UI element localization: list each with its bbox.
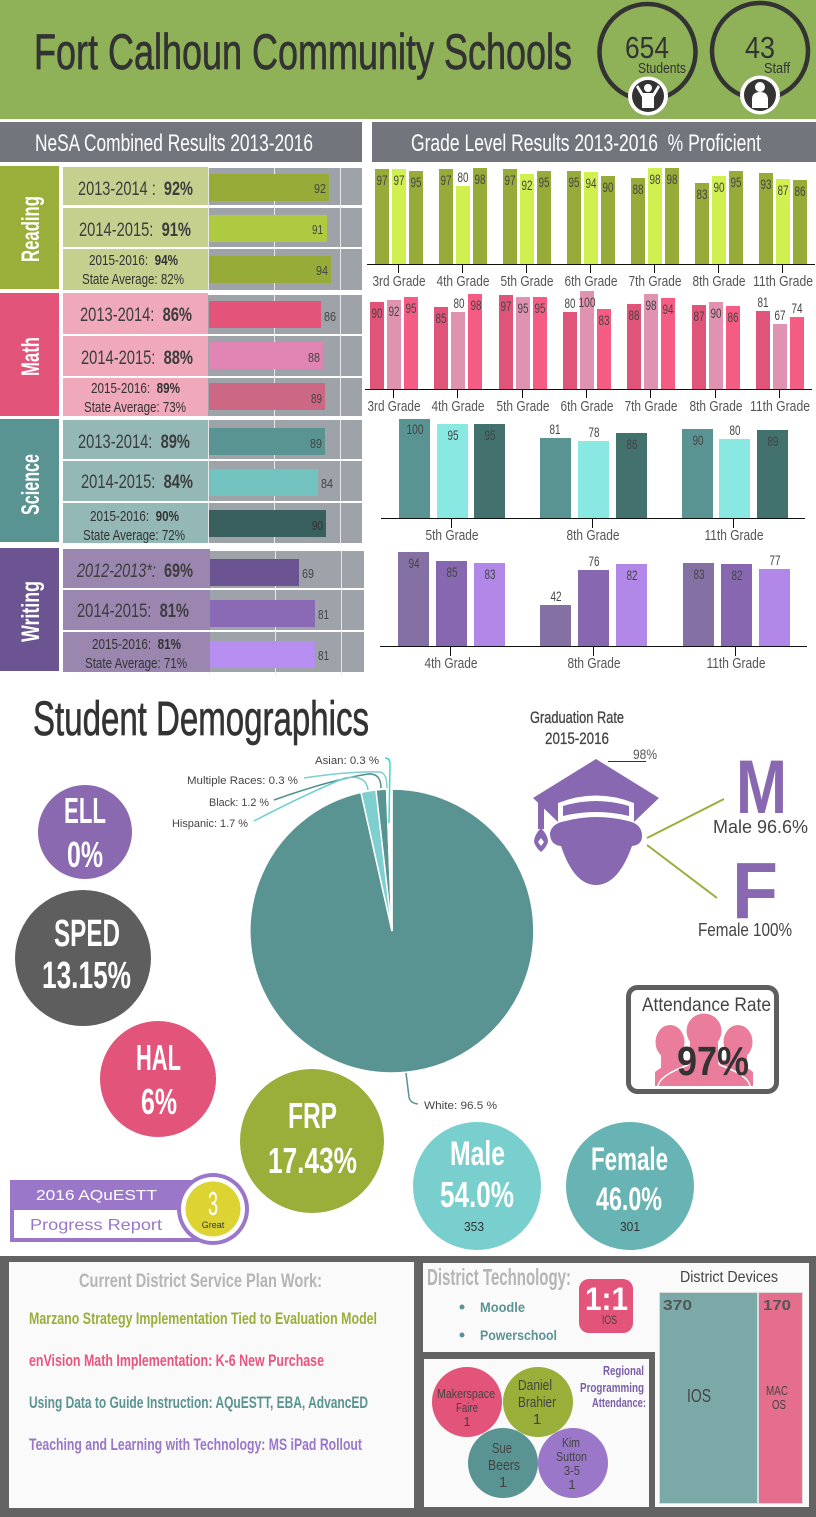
stat: staff: Staff [764, 60, 791, 77]
bubble: male: Male [450, 1135, 505, 1173]
bars: 4th grade: 94 [408, 556, 420, 571]
bubble: SPED: 13.15% [42, 955, 131, 997]
bars: 3rd grade [372, 169, 426, 290]
bars: 6th grade: 100 [578, 295, 596, 310]
bars: 8th grade: 86 [728, 310, 738, 325]
bubble: female [566, 1122, 694, 1250]
row: writing 2014-2015: 81 [318, 607, 329, 622]
tile: IOS: 370 [663, 1297, 692, 1314]
row: reading 2015-2016: State Average: 82% [82, 271, 184, 288]
bars: 8th grade: 8th Grade [692, 274, 746, 290]
bars: 8th grade: 90 [714, 180, 724, 195]
bars: 8th grade: 95 [730, 175, 742, 190]
callout: overall rate [608, 746, 657, 762]
heading: regional programming: Regional [603, 1363, 644, 1378]
bars: 11th grade: 77 [770, 553, 780, 568]
bubble: SPED [15, 890, 151, 1026]
bubble: Daniel Brahier [503, 1367, 573, 1437]
heading: NeSA combined results: NeSA Combined Results 2013-2016 [35, 130, 313, 157]
chart: math by grade [365, 291, 812, 415]
bars: 4th grade [432, 294, 484, 415]
row: math 2013-2014: 2013-2014: 86% [80, 305, 192, 326]
bubble: Kim Sutton: 1 [568, 1477, 576, 1492]
bars: 6th grade: 6th Grade [564, 274, 618, 290]
bars: 5th grade: 5th Grade [426, 528, 478, 544]
bubble: Daniel Brahier: Daniel [518, 1377, 552, 1394]
stat: students: 654 [625, 30, 669, 65]
bubble: ELL: ELL [64, 790, 106, 831]
bars: 8th grade: 8th Grade [690, 399, 742, 415]
pie chart: student race [172, 755, 534, 1112]
bubble: Daniel Brahier: Brahier [518, 1394, 556, 1411]
label: white [406, 1073, 497, 1112]
subject label: math [0, 293, 59, 416]
bubble: ELL [38, 785, 132, 879]
heading: regional programming [580, 1363, 646, 1410]
label: black: Black: 1.2 % [209, 797, 269, 809]
row: reading 2014-2015: 91 [312, 222, 323, 237]
bubble: female: Female [591, 1141, 668, 1177]
bubble: male: 54.0% [440, 1174, 514, 1215]
row: math 2014-2015 [63, 336, 323, 376]
male rate [713, 745, 808, 837]
female rate [698, 846, 792, 940]
row: science 2014-2015: 2014-2015: 84% [81, 472, 193, 493]
row: reading 2015-2016: 2015-2016: 94% [89, 252, 178, 269]
bars: 11th grade: 67 [774, 308, 786, 323]
bars: 4th grade: 83 [484, 567, 496, 582]
row: writing 2012-2013: 2012-2013*: 69% [76, 561, 193, 582]
row: reading 2013-2014 [63, 167, 329, 205]
heading: regional programming: Programming [580, 1380, 644, 1395]
badge: 1:1 IOS: 1:1 [585, 1281, 628, 1317]
bars: 7th grade: 98 [666, 172, 678, 187]
bars: 11th grade: 11th Grade [704, 528, 764, 544]
bars: 4th grade: 98 [470, 298, 482, 313]
tile: MAC OS [759, 1293, 802, 1503]
panel: math combined results [0, 293, 362, 416]
bars: 8th grade: 76 [588, 554, 600, 569]
row: math 2013-2014 [63, 293, 336, 334]
stat: staff [712, 3, 808, 114]
heading: student demographics: Student Demographics [33, 693, 369, 746]
bars: 8th grade [690, 302, 742, 415]
bubble: FRP [240, 1069, 384, 1213]
bars: 11th grade: 74 [792, 301, 803, 316]
bubble: Makerspace Faire: 1 [463, 1414, 471, 1429]
item: enVision: enVision Math Implementation: K-6 New Purchase [29, 1351, 324, 1370]
bars: 11th grade: 83 [694, 567, 704, 582]
tile: MAC OS: MAC [766, 1383, 788, 1398]
row: reading 2015-2016: 94 [316, 263, 328, 278]
bars: 8th grade: 87 [694, 309, 704, 324]
bubble: Kim Sutton [538, 1428, 608, 1498]
panel: writing combined results [0, 548, 364, 675]
chart: reading by grade [367, 168, 815, 290]
badge: 1:1 IOS [579, 1279, 633, 1333]
connector: male [647, 799, 724, 838]
icon: group of people [655, 1014, 753, 1088]
bars: 11th grade [683, 553, 790, 672]
bars: 11th grade: 87 [778, 183, 788, 198]
bars: 5th grade: 95 [518, 301, 528, 316]
stat: students [600, 4, 696, 116]
panel: science combined results [0, 419, 362, 544]
tile: MAC OS: 170 [763, 1297, 791, 1314]
bubble: Kim Sutton: Kim [562, 1435, 580, 1450]
badge: AQuESTT progress report [10, 1173, 249, 1245]
bars: 4th grade: 4th Grade [432, 399, 484, 415]
bars: 8th grade: 90 [710, 306, 722, 321]
bars: 5th grade: 92 [522, 178, 532, 193]
bars: 11th grade: 82 [732, 568, 742, 583]
row: reading 2015-2016 [63, 249, 331, 290]
row: science 2013-2014 [63, 420, 325, 459]
bars: 5th grade [496, 295, 550, 415]
icon: adult with child [740, 76, 780, 114]
bars: 8th grade [540, 554, 647, 672]
bars: 11th grade: 89 [768, 434, 778, 449]
panel: attendance rate [628, 988, 776, 1092]
badge: AQuESTT progress report: 2016 AQuESTT [36, 1187, 157, 1204]
bars: 8th grade: 81 [550, 422, 560, 437]
bubble: FRP: FRP [288, 1095, 337, 1136]
item: technology: Teaching and Learning with Technology: MS iPad Rollout [29, 1435, 362, 1454]
bubble: FRP: 17.43% [268, 1140, 357, 1181]
bars: 5th grade: 95 [534, 301, 546, 316]
bubble: ELL: 0% [67, 834, 103, 875]
bars: 6th grade [560, 291, 614, 415]
row: reading 2014-2015: 2014-2015: 91% [79, 220, 191, 241]
heading: graduation year: 2015-2016 [545, 729, 609, 748]
bars: 4th grade [398, 552, 505, 672]
bubble: Sue Beers [468, 1428, 538, 1498]
bars: 4th grade: 80 [454, 296, 464, 311]
bubble: male: 353 [464, 1219, 484, 1234]
panel: district technology [423, 1263, 809, 1507]
bars: 4th grade: 4th Grade [436, 274, 490, 290]
row: science 2015-2016: 2015-2016: 90% [90, 508, 179, 525]
bars: 3rd grade: 90 [372, 306, 382, 321]
subject label: reading [0, 166, 59, 289]
heading: regional programming: Attendance: [592, 1395, 646, 1410]
chart: writing by grade [380, 552, 807, 672]
bars: 7th grade [624, 294, 678, 415]
subject label: writing: Writing [17, 581, 45, 642]
bars: 6th grade: 90 [602, 180, 614, 195]
bars: 6th grade: 80 [564, 296, 576, 311]
bars: 7th grade: 98 [650, 172, 660, 187]
chart: district devices treemap [659, 1269, 803, 1504]
heading: graduation rate: Graduation Rate [530, 708, 624, 727]
bars: 8th grade: 82 [626, 568, 638, 583]
bars: 3rd grade: 3rd Grade [368, 399, 420, 415]
bars: 6th grade: 83 [598, 313, 610, 328]
row: science 2013-2014: 2013-2014: 89% [78, 432, 190, 453]
heading: district technology: District Technology: [427, 1264, 571, 1290]
badge: AQuESTT progress report: Progress Report [30, 1217, 163, 1234]
bars: 11th grade: 11th Grade [706, 656, 766, 672]
tile: IOS: IOS [687, 1386, 711, 1406]
bars: 4th grade: 80 [458, 170, 468, 185]
row: writing 2015-2016 [63, 632, 329, 672]
header banner [0, 0, 816, 119]
row: math 2015-2016: State Average: 73% [84, 399, 186, 416]
subject label: writing [0, 548, 59, 671]
male rate: Male 96.6% [713, 817, 808, 837]
row: reading 2013-2014: 92 [314, 181, 326, 196]
bars: 6th grade: 94 [586, 176, 597, 191]
bars: 6th grade: 6th Grade [560, 399, 614, 415]
list: technology tools: Moodle [480, 1299, 525, 1315]
bars: 7th grade: 88 [632, 182, 644, 197]
bars: 11th grade: 80 [730, 423, 740, 438]
bars: 4th grade: 4th Grade [424, 656, 478, 672]
row: science 2015-2016 [63, 503, 326, 544]
label: black [209, 774, 381, 809]
label: hispanic [172, 777, 368, 830]
item: Marzano: Marzano Strategy Implementation Tied to Evaluation Model [29, 1309, 377, 1328]
stat: staff: 43 [745, 30, 775, 65]
bars: 3rd grade [368, 297, 420, 415]
bars: 7th grade: 94 [662, 302, 674, 317]
subject label: science: Science [17, 454, 45, 515]
chart: science by grade [381, 419, 805, 544]
bars: 8th grade: 86 [626, 437, 638, 452]
stat: students: Students [638, 60, 686, 77]
bars: 5th grade [500, 169, 554, 290]
chart: district devices treemap: District Devices [680, 1269, 778, 1286]
bubble: Daniel Brahier: 1 [533, 1411, 541, 1428]
bars: 11th grade [750, 295, 810, 415]
bars: 5th grade: 95 [484, 428, 496, 443]
bubble: HAL: HAL [136, 1037, 181, 1078]
bubble: Makerspace Faire [432, 1367, 502, 1437]
bars: 5th grade: 97 [504, 173, 516, 188]
bars: 3rd grade: 3rd Grade [372, 274, 426, 290]
row: writing 2015-2016: State Average: 71% [85, 655, 187, 672]
subject label: science [0, 419, 59, 542]
badge: AQuESTT progress report: Great [202, 1220, 225, 1230]
subject label: reading: Reading [17, 196, 45, 262]
bars: 6th grade: 95 [568, 175, 580, 190]
female rate: Female 100% [698, 920, 792, 940]
graduation rate [530, 708, 808, 940]
bars: 11th grade [753, 173, 813, 290]
row: writing 2014-2015: 2014-2015: 81% [77, 601, 189, 622]
icon: child with raised arms [628, 76, 668, 116]
bars: 8th grade: 78 [588, 425, 600, 440]
label: multiple races [187, 772, 387, 788]
bubble: SPED: SPED [54, 913, 120, 955]
bars: 11th grade: 90 [692, 433, 704, 448]
row: math 2014-2015: 2014-2015: 88% [81, 348, 193, 369]
panel: attendance rate: Attendance Rate [642, 995, 771, 1016]
row: writing 2015-2016: 2015-2016: 81% [92, 636, 181, 653]
bubble: Sue Beers: Sue [492, 1440, 512, 1457]
label: white: White: 96.5 % [424, 1100, 497, 1112]
row: math 2014-2015: 88 [308, 350, 320, 365]
title: Fort Calhoun Community Schools [34, 24, 572, 80]
row: math 2015-2016: 2015-2016: 89% [91, 380, 180, 397]
item: using data: Using Data to Guide Instruction: AQuESTT, EBA, AdvancED [29, 1393, 368, 1412]
bars: 3rd grade: 97 [376, 173, 388, 188]
label: hispanic: Hispanic: 1.7 % [172, 818, 248, 830]
bubble: female: 301 [620, 1219, 640, 1234]
row: science 2015-2016: 90 [312, 518, 323, 533]
label: multiple races: Multiple Races: 0.3 % [187, 775, 298, 787]
bars: 3rd grade: 92 [388, 304, 400, 319]
bubble: Kim Sutton: 3-5 [564, 1463, 580, 1478]
bars: 5th grade: 95 [538, 175, 550, 190]
callout: overall rate: 98% [633, 746, 657, 762]
tile: MAC OS: OS [772, 1397, 786, 1412]
bars: 8th grade [540, 422, 647, 544]
row: science 2014-2015 [63, 461, 333, 501]
bubble: Sue Beers: 1 [499, 1474, 507, 1491]
bubble: Sue Beers: Beers [488, 1457, 520, 1474]
bars: 4th grade [436, 168, 490, 290]
row: math 2015-2016 [63, 378, 325, 416]
panel: attendance rate: 97% [677, 1038, 749, 1084]
bars: 8th grade: 83 [696, 187, 708, 202]
bars: 7th grade: 98 [646, 298, 656, 313]
bars: 7th grade: 88 [628, 308, 640, 323]
bars: 8th grade [692, 171, 746, 290]
bars: 5th grade: 5th Grade [500, 274, 554, 290]
bars: 11th grade: 81 [758, 295, 768, 310]
bars: 8th grade: 42 [550, 589, 562, 604]
badge: AQuESTT progress report: 3 [208, 1185, 218, 1222]
badge: 1:1 IOS: IOS [602, 1313, 617, 1327]
heading: NeSA combined results [0, 122, 362, 162]
bars: 3rd grade: 97 [394, 173, 404, 188]
label: asian: Asian: 0.3 % [315, 755, 379, 767]
list: technology tools [460, 1299, 557, 1343]
bubble: Kim Sutton: Sutton [556, 1449, 587, 1464]
footer background [0, 1256, 816, 1517]
row: math 2013-2014: 86 [324, 309, 336, 324]
panel: reading combined results [0, 166, 362, 290]
bars: 5th grade: 95 [448, 428, 458, 443]
subject label: math: Math [17, 337, 45, 376]
bars: 11th grade: 86 [794, 184, 806, 199]
bubble: HAL: 6% [141, 1081, 177, 1122]
bars: 4th grade: 85 [436, 311, 446, 326]
bars: 8th grade: 8th Grade [566, 528, 620, 544]
bars: 4th grade: 97 [440, 173, 452, 188]
bubble: Makerspace Faire: Faire [456, 1400, 478, 1415]
bars: 4th grade: 85 [446, 565, 458, 580]
bars: 5th grade: 97 [500, 299, 512, 314]
bars: 11th grade [682, 423, 788, 544]
row: writing 2012-2013 [63, 549, 314, 588]
row: science 2014-2015: 84 [321, 476, 333, 491]
row: writing 2015-2016: 81 [318, 648, 329, 663]
heading: service plan: Current District Service Plan Work: [79, 1271, 322, 1292]
label: asian [315, 755, 390, 823]
row: writing 2012-2013: 69 [302, 566, 314, 581]
female rate: F [732, 846, 778, 935]
panel: regional programming attendance [424, 1359, 649, 1507]
bars: 5th grade [399, 419, 505, 544]
bars: 11th grade: 93 [760, 177, 772, 192]
male rate: M [736, 745, 787, 830]
bubble: Makerspace Faire: Makerspace [437, 1386, 495, 1401]
bars: 4th grade: 98 [474, 172, 486, 187]
bars: 7th grade: 7th Grade [624, 399, 678, 415]
tile: IOS [660, 1293, 757, 1503]
bars: 6th grade [564, 171, 618, 290]
bubble: HAL [100, 1021, 216, 1137]
row: science 2015-2016: State Average: 72% [83, 527, 185, 544]
row: science 2013-2014: 89 [310, 436, 322, 451]
row: reading 2014-2015 [63, 208, 327, 247]
bubble: male [413, 1122, 541, 1250]
bubble: female: 46.0% [596, 1181, 662, 1217]
bars: 7th grade [628, 168, 682, 290]
heading: grade level results [372, 122, 816, 162]
bars: 5th grade: 5th Grade [496, 399, 550, 415]
row: writing 2014-2015 [63, 590, 329, 630]
row: math 2015-2016: 89 [311, 391, 322, 406]
bars: 5th grade: 100 [406, 422, 424, 437]
bars: 8th grade: 8th Grade [568, 656, 620, 672]
connector: female [647, 845, 717, 898]
list: technology tools: Powerschool [480, 1327, 557, 1343]
bars: 7th grade: 7th Grade [628, 274, 682, 290]
row: reading 2013-2014: 2013-2014 : 92% [78, 179, 193, 200]
bars: 3rd grade: 95 [406, 301, 416, 316]
panel: district service plan [9, 1262, 414, 1508]
icon: graduate with cap [533, 759, 659, 885]
bars: 3rd grade: 95 [410, 175, 422, 190]
